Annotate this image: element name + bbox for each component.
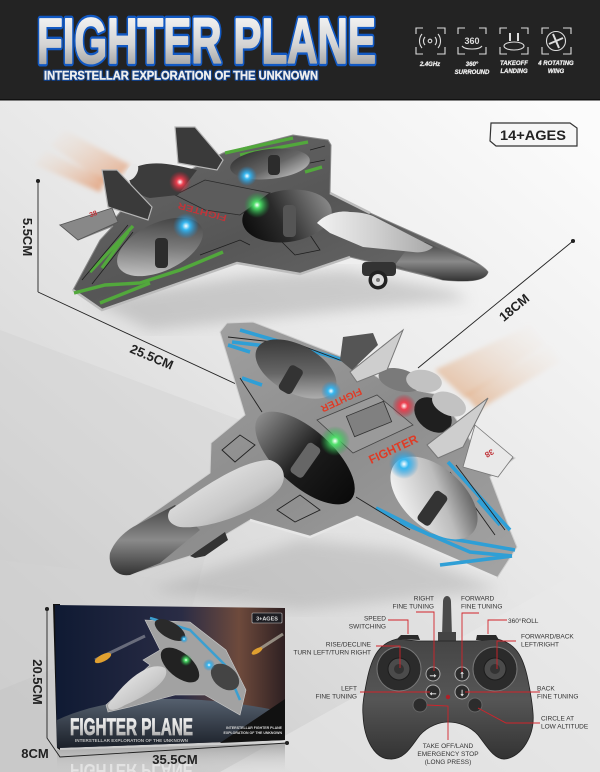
label: circle at low altitude: CIRCLE AT [541, 716, 574, 722]
canopy hatch [317, 395, 413, 453]
icon: 2.4GHz [416, 28, 445, 68]
label: speed switching: SPEED [364, 616, 386, 622]
tail fins [175, 127, 223, 170]
blue wing stripes [228, 330, 515, 565]
dimension label: 5.5CM: 5.5CM [20, 218, 35, 256]
dark corner [220, 699, 285, 743]
label: left fine tuning: FINE TUNING [316, 694, 357, 700]
button arrows: → [428, 670, 438, 680]
age badge [490, 123, 577, 146]
light wing edge [73, 193, 370, 310]
box reflection [57, 743, 285, 772]
icon: rotating wing [537, 28, 574, 75]
panel lines [82, 146, 325, 284]
controller body [363, 639, 533, 759]
tail plane number [463, 425, 513, 477]
label: take off/land: (LONG PRESS) [425, 759, 471, 766]
canopy hatch [175, 180, 270, 215]
label: left fine tuning: LEFT [341, 686, 357, 692]
landing wheel [190, 532, 228, 558]
label: rise/decline: TURN LEFT/TURN RIGHT [293, 650, 371, 656]
panel lines [222, 337, 505, 535]
title: FIGHTER PLANE [37, 5, 376, 77]
icon: 360 surround: SURROUND [455, 70, 490, 76]
dimension lines: upper plane [36, 179, 575, 384]
icon: rotating wing: WING [548, 69, 564, 75]
feature icons [416, 28, 574, 76]
trim buttons [413, 667, 482, 712]
button arrows: ← [428, 688, 438, 698]
label: back fine tuning: BACK [537, 686, 555, 692]
box corner text [224, 726, 283, 735]
button arrows: ↑ [460, 670, 464, 680]
icon: takeoff landing: LANDING [500, 69, 528, 75]
age badge: 14+AGES [500, 128, 566, 143]
shoulder buttons [397, 635, 420, 640]
icon: takeoff landing [500, 28, 528, 75]
lower wing fan [375, 441, 493, 555]
dimension label: 20.5CM: 20.5CM [30, 659, 45, 705]
box dimension lines [45, 607, 289, 757]
fighter text: FIGHTER [366, 432, 420, 467]
fuselage and wings [110, 322, 517, 578]
shadow [90, 270, 470, 330]
box subtitle: INTERSTELLAR EXPLORATION OF THE UNKNOWN [75, 738, 188, 743]
right stick [473, 647, 517, 691]
dimension label: 8CM: 8CM [21, 746, 49, 761]
dimension label: 25.5CM: 25.5CM [128, 341, 176, 373]
header band [0, 0, 600, 100]
label: right fine tuning: RIGHT [414, 596, 434, 602]
box age badge: 3+AGES [256, 616, 278, 622]
box corner text: EXPLORATION OF THE UNKNOWN [224, 731, 282, 735]
icon: 2.4GHz: 2.4GHz [419, 62, 440, 68]
rear engine [376, 364, 470, 440]
light wing edge [250, 517, 497, 578]
product box [53, 604, 285, 772]
callout lines [360, 612, 540, 740]
box age badge [252, 613, 282, 623]
title [37, 5, 376, 77]
nose [110, 505, 200, 575]
fuselage and wings [60, 135, 488, 310]
nose [395, 242, 488, 281]
label: forward fine tuning: FINE TUNING [461, 604, 502, 610]
centre fan [240, 396, 370, 520]
label: rise/decline: RISE/DECLINE [326, 642, 371, 648]
label: forward/back: FORWARD/BACK [521, 634, 574, 640]
dimension label: 35.5CM: 35.5CM [152, 752, 198, 767]
rear fan [229, 145, 311, 183]
power LED [446, 695, 450, 699]
engine [129, 163, 197, 198]
box title: FIGHTER PLANE [70, 714, 193, 741]
tail fins [350, 330, 403, 382]
icon: 360 surround: 360 [464, 36, 480, 46]
label: take off/land: TAKE OFF/LAND [423, 743, 473, 750]
dimension label: 18CM: 18CM [496, 291, 532, 324]
upper plane: green [35, 127, 488, 330]
control labels [293, 596, 589, 766]
motor pods [155, 155, 296, 268]
subtitle: INTERSTELLAR EXPLORATION OF THE UNKNOWN [44, 68, 318, 82]
cockpit [317, 211, 433, 252]
title: FIGHTER PLANE [37, 5, 376, 77]
label: circle at low altitude: LOW ALTITUDE [541, 724, 589, 730]
upper wing fan [246, 327, 346, 411]
label: take off/land: EMERGENCY STOP [417, 751, 479, 758]
cockpit [168, 460, 284, 527]
box corner text: INTERSTELLAR FIGHTER PLANE [226, 726, 283, 730]
fighter text, mirrored: FIGHTER [318, 385, 363, 414]
tail plane number: 38 [483, 447, 495, 460]
front wing fan [108, 206, 212, 288]
button arrows: ↓ [460, 688, 464, 698]
icon: rotating wing: 4 ROTATING [537, 61, 574, 67]
LED lights [244, 192, 270, 218]
lower plane: blue [110, 322, 560, 610]
label: back fine tuning: FINE TUNING [537, 694, 578, 700]
centre fan [239, 184, 335, 248]
subtitle: INTERSTELLAR EXPLORATION OF THE UNKNOWN [44, 68, 318, 82]
box art background [55, 605, 285, 748]
label: 360 roll: 360°ROLL [508, 617, 539, 625]
button arrows [428, 670, 464, 698]
antenna [442, 596, 452, 637]
label: right fine tuning: FINE TUNING [393, 604, 434, 610]
icon: 360 surround: 360° [466, 62, 479, 68]
motor pods [277, 364, 449, 527]
label: forward fine tuning: FORWARD [461, 596, 494, 602]
tail plane top [340, 333, 378, 370]
earth [57, 699, 285, 748]
shadow [150, 540, 500, 610]
LED lights [320, 426, 350, 456]
controller [363, 596, 533, 759]
meteors [93, 634, 283, 665]
upper plane: green: 38 [89, 210, 98, 219]
box plane [106, 615, 246, 715]
box side [53, 604, 60, 750]
label: speed switching: SWITCHING [349, 624, 386, 630]
green wing stripes [74, 138, 322, 303]
fighter text: FIGHTER [176, 200, 228, 223]
left stick [377, 647, 421, 691]
tail plane [60, 208, 118, 240]
wheel [362, 262, 396, 290]
exhaust flames [435, 325, 560, 410]
icon: 360 surround [455, 28, 490, 76]
label: forward/back: LEFT/RIGHT [521, 642, 559, 648]
icon: takeoff landing: TAKEOFF [500, 61, 528, 67]
exhaust flames [35, 130, 130, 192]
